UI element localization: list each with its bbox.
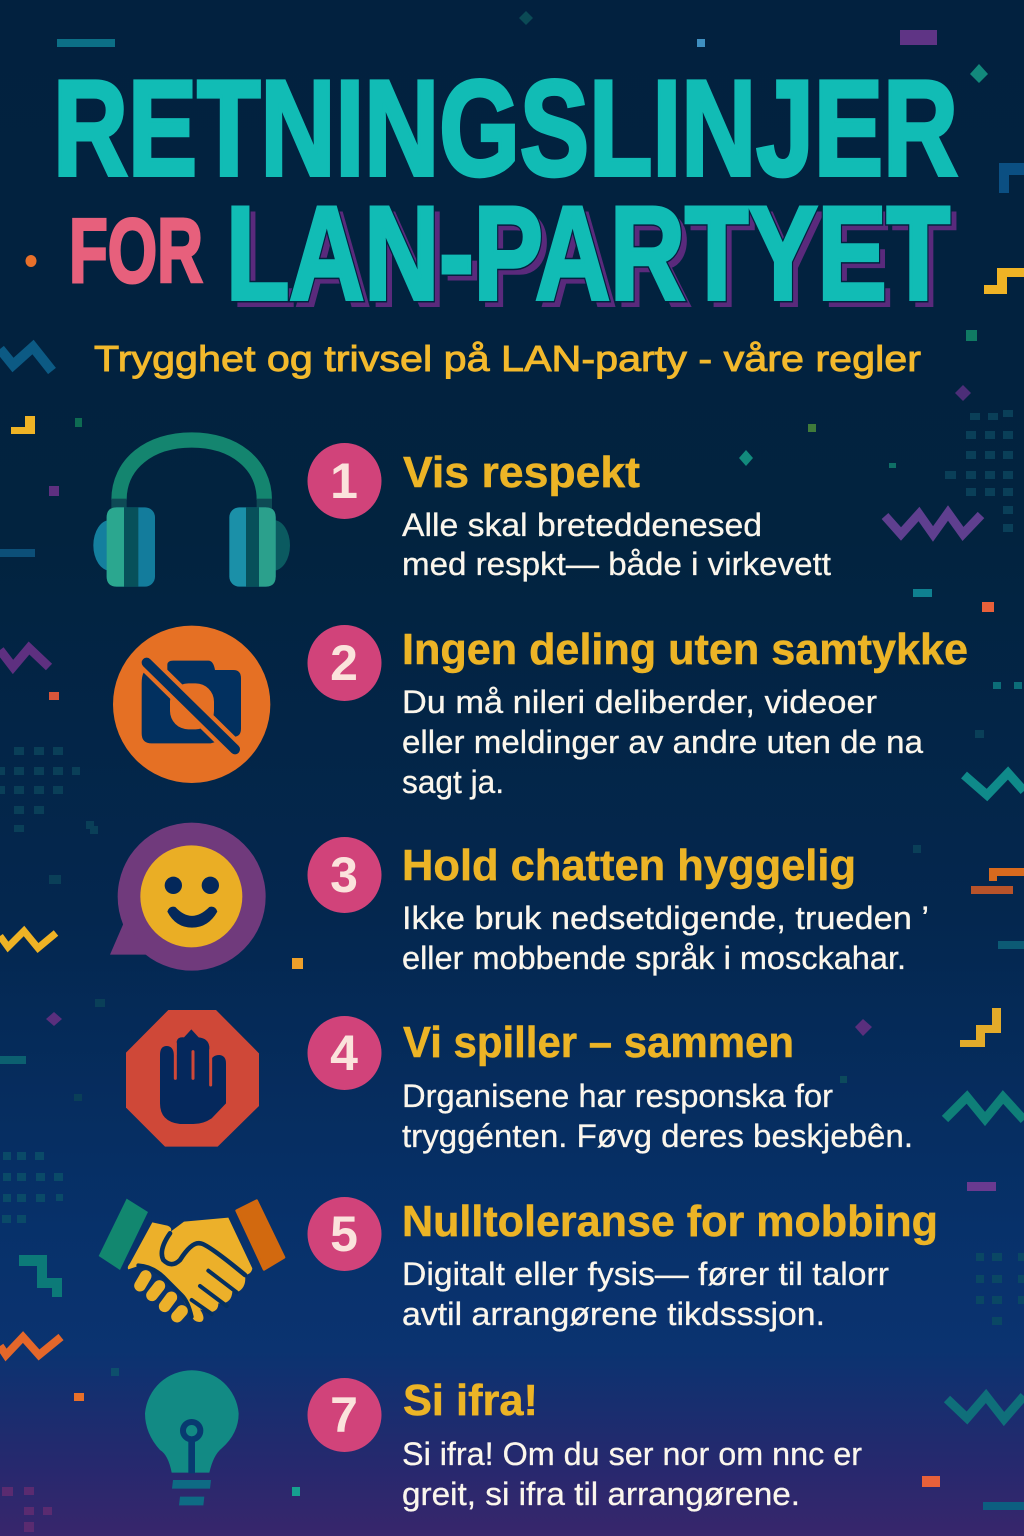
body 4 — [402, 1078, 913, 1154]
icon: handshake — [99, 1199, 284, 1322]
rule 4 — [308, 1016, 913, 1154]
body 7: greit, si ifra til arrangørene. — [402, 1476, 800, 1512]
heading 2: Ingen deling uten samtykke — [402, 625, 968, 674]
body 5: avtil arrangørene tikdsssjon. — [402, 1296, 825, 1332]
body 2: eller meldinger av andre uten de na — [402, 724, 923, 760]
heading 5: Nulltoleranse for mobbing — [402, 1197, 938, 1246]
heading 1: Vis respekt — [403, 448, 640, 497]
body 5: Digitalt eller fysis— fører til talorr — [402, 1256, 889, 1292]
number badge 7 — [308, 1378, 382, 1452]
body 4: tryggénten. Føvg deres beskjebên. — [402, 1118, 913, 1154]
body 4: Drganisene har responska for — [402, 1078, 833, 1114]
icon: headphones — [93, 440, 290, 587]
body 7 — [402, 1436, 862, 1512]
icon: no camera — [113, 626, 270, 783]
number badge 5: 5 — [330, 1206, 358, 1262]
body 7: Si ifra! Om du ser nor om nnc er — [402, 1436, 862, 1472]
number badge 2: 2 — [330, 635, 358, 691]
subtitle: Trygghet og trivsel på LAN-party - våre regler — [94, 338, 921, 379]
number badge 4: 4 — [330, 1025, 358, 1081]
title — [53, 52, 958, 334]
body 1: med respkt— både i virkevett — [402, 546, 831, 582]
icon: light bulb — [145, 1370, 239, 1505]
icon: smiley chat bubble — [110, 823, 266, 971]
number badge 4 — [308, 1016, 382, 1090]
number badge 2 — [308, 625, 382, 701]
rule 3 — [308, 837, 929, 976]
number badge 3: 3 — [330, 847, 358, 903]
body 3: Ikke bruk nedsetdigende, trueden ’ — [402, 900, 929, 936]
number badge 1: 1 — [330, 453, 358, 509]
body 3: eller mobbende språk i mosckahar. — [402, 940, 906, 976]
rule 1 — [308, 443, 831, 582]
heading 3: Hold chatten hyggelig — [402, 841, 856, 890]
body 1 — [402, 507, 831, 582]
number badge 5 — [308, 1197, 382, 1271]
body 3 — [402, 900, 929, 976]
rule 5 — [308, 1197, 938, 1332]
body 5 — [402, 1256, 889, 1332]
body 1: Alle skal breteddenesed — [402, 507, 762, 543]
title word: FOR: FOR — [69, 201, 203, 302]
heading 7: Si ifra! — [403, 1376, 538, 1425]
body 2 — [402, 684, 923, 800]
heading 4: Vi spiller – sammen — [403, 1018, 794, 1067]
body 2: Du må nileri deliberder, videoer — [402, 684, 877, 720]
icon: stop hand — [126, 1010, 259, 1147]
number badge 7: 7 — [330, 1387, 358, 1443]
rule 2 — [308, 625, 968, 800]
number badge 1 — [308, 443, 382, 519]
body 2: sagt ja. — [402, 764, 504, 800]
rule 7 — [308, 1376, 862, 1512]
number badge 3 — [308, 837, 382, 913]
